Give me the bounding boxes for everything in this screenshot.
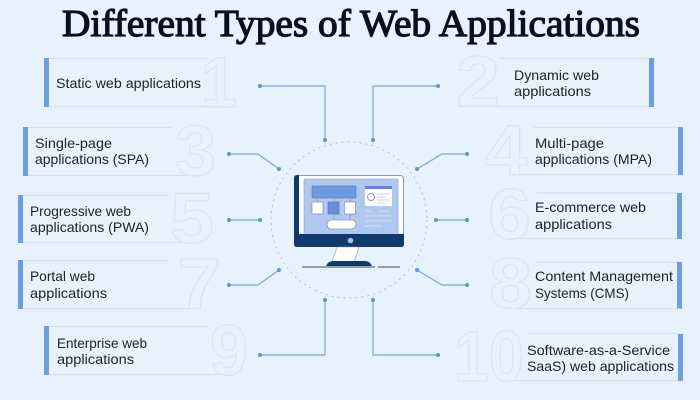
panel: card 4 multi-page applications: Multi-page bbox=[535, 135, 604, 151]
panel: card 4 multi-page applications: applications (MPA) bbox=[535, 151, 652, 167]
panel: card 4 multi-page applications bbox=[485, 112, 683, 191]
panel: card 4 multi-page applications: 4 bbox=[485, 112, 528, 191]
panel: card 10 software-as-a-service bbox=[454, 318, 683, 397]
panel: card 8 content management systems: Content Management bbox=[535, 268, 673, 284]
panel: card 1 static web applications: Static web applications bbox=[56, 75, 201, 91]
panel: card 10 software-as-a-service: Software-as-a-Service bbox=[527, 342, 670, 358]
icon: desktop monitor bbox=[294, 175, 404, 267]
panel: card 1 static web applications: 1 bbox=[201, 44, 237, 123]
panel: card 2 dynamic web applications: applications bbox=[514, 83, 591, 99]
panel: card 9 enterprise web applications: 9 bbox=[210, 312, 248, 391]
panel: card 3 single-page applications: applications (SPA) bbox=[35, 151, 149, 167]
panel: card 2 dynamic web applications: Dynamic web bbox=[514, 67, 599, 83]
panel: card 9 enterprise web applications bbox=[44, 312, 248, 391]
panel: card 6 e-commerce web applications: applications bbox=[535, 216, 612, 232]
panel: card 9 enterprise web applications: Enterprise web bbox=[57, 335, 147, 351]
panel: card 10 software-as-a-service: SaaS) web applications bbox=[527, 358, 674, 374]
dashed circle bbox=[271, 142, 427, 298]
panel: card 7 portal web applications: Portal web bbox=[30, 268, 95, 284]
panel: card 7 portal web applications: applications bbox=[30, 285, 107, 301]
panel: card 6 e-commerce web applications bbox=[488, 176, 682, 255]
panel: card 7 portal web applications: 7 bbox=[178, 245, 221, 324]
panel: card 10 software-as-a-service: 10 bbox=[454, 318, 524, 397]
panel: card 9 enterprise web applications: applications bbox=[57, 351, 134, 367]
panel: card 2 dynamic web applications bbox=[456, 43, 654, 122]
panel: card 1 static web applications bbox=[44, 44, 237, 123]
panel: card 5 progressive web applications bbox=[18, 180, 214, 259]
panel: card 2 dynamic web applications: 2 bbox=[456, 43, 500, 122]
panel: card 3 single-page applications: Single-page bbox=[35, 135, 112, 151]
connectors bbox=[227, 84, 469, 357]
panel: card 5 progressive web applications: applications (PWA) bbox=[30, 219, 149, 235]
panel: card 8 content management systems: 8 bbox=[489, 245, 532, 324]
panel: card 8 content management systems bbox=[489, 245, 682, 324]
panel: card 3 single-page applications: 3 bbox=[175, 112, 216, 191]
panel: card 3 single-page applications bbox=[23, 112, 216, 191]
panel: card 6 e-commerce web applications: E-commerce web bbox=[535, 199, 646, 215]
panel: card 6 e-commerce web applications: 6 bbox=[488, 176, 531, 255]
panel: card 5 progressive web applications: Progressive web bbox=[30, 203, 131, 219]
panel: card 8 content management systems: Systems (CMS) bbox=[535, 285, 629, 301]
title: Different Types of Web Applications bbox=[62, 3, 640, 45]
panel: card 7 portal web applications bbox=[18, 245, 221, 324]
panel: card 5 progressive web applications: 5 bbox=[170, 180, 214, 259]
